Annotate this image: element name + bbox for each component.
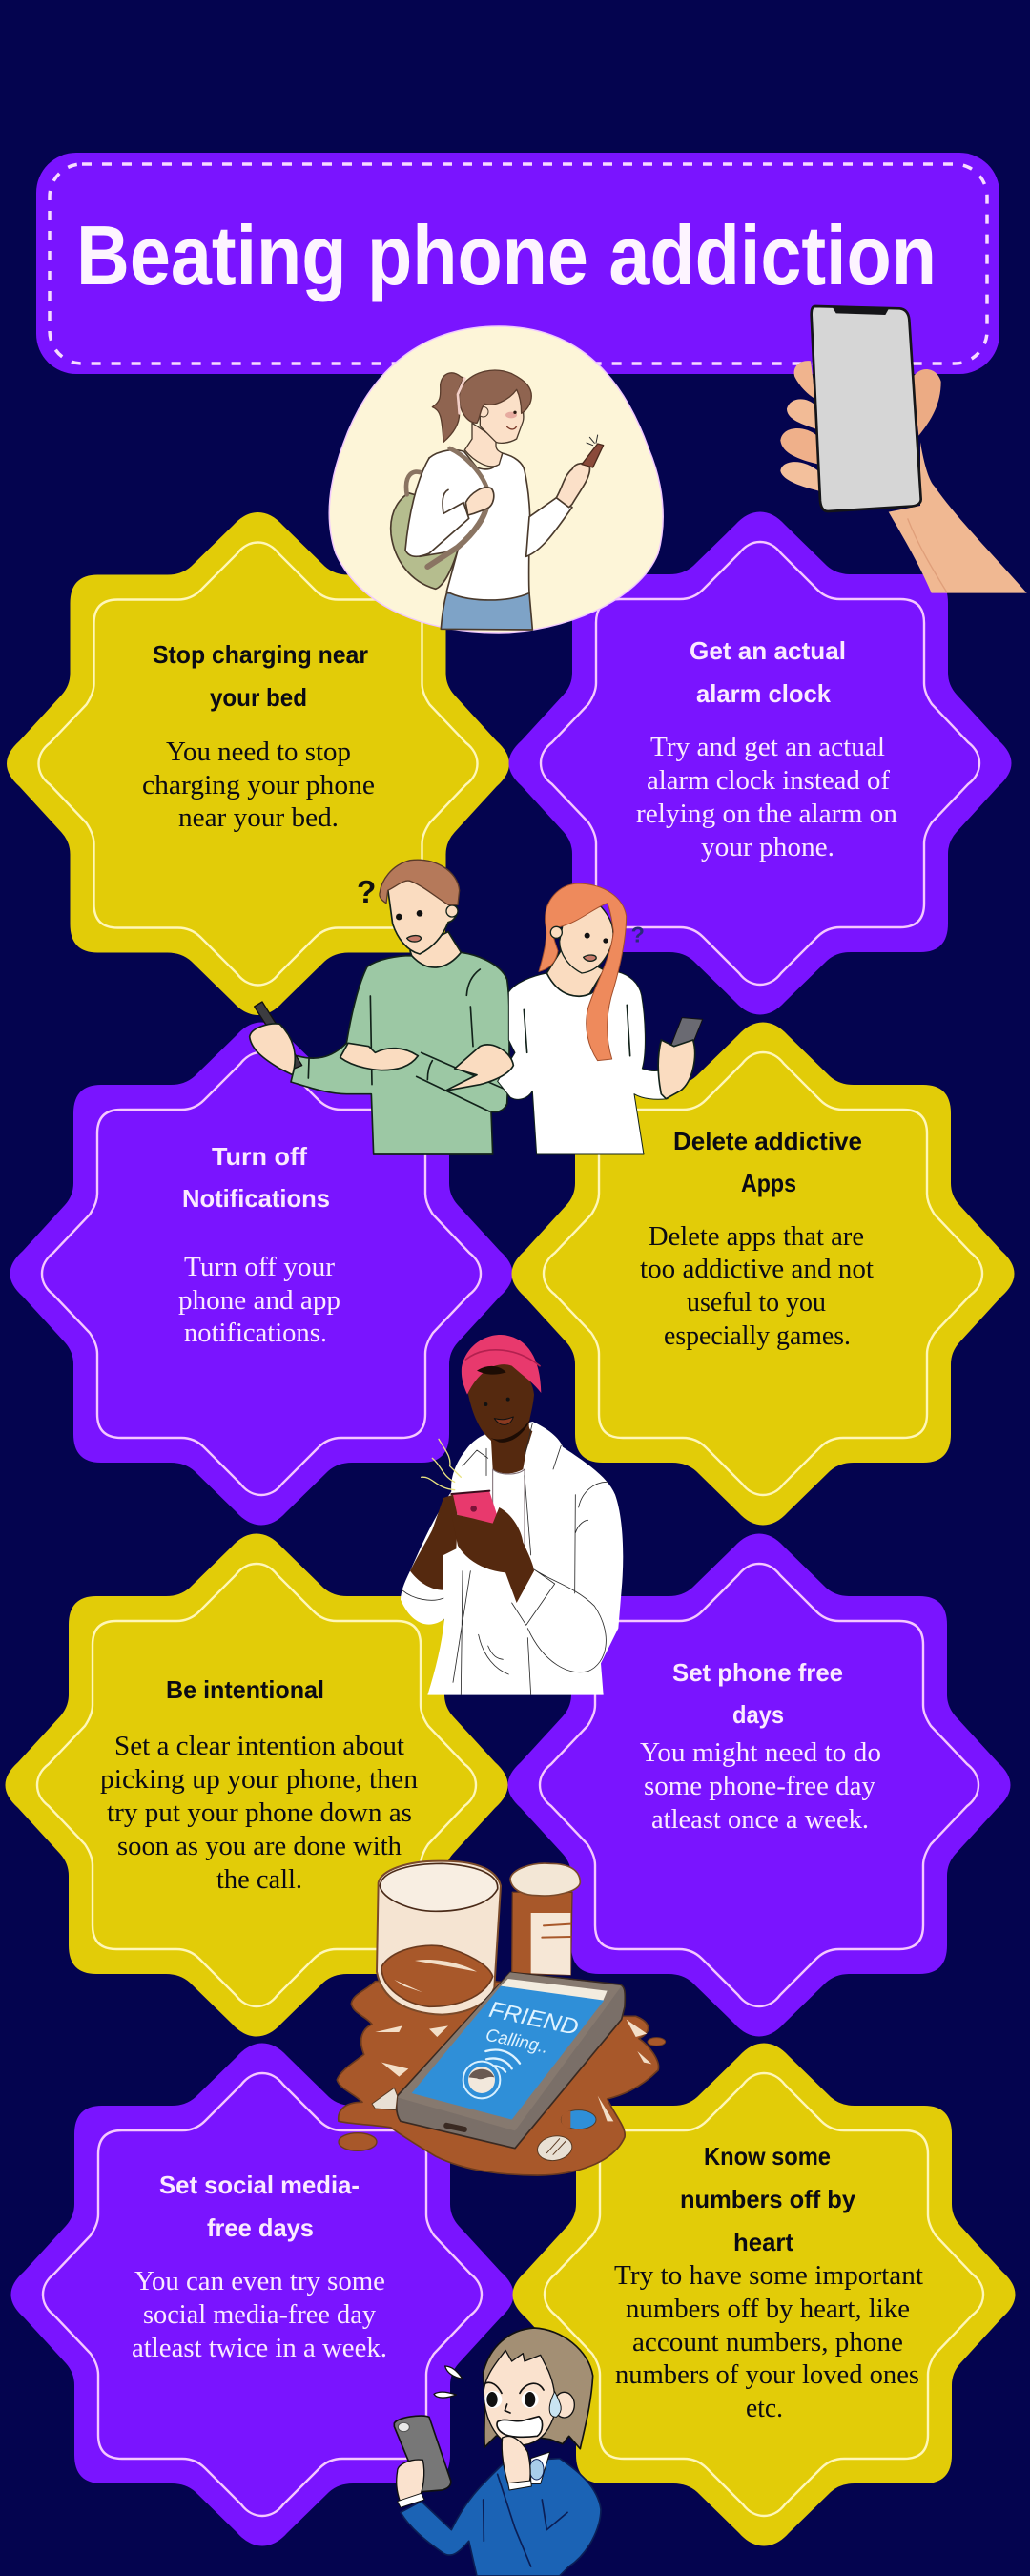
text block: alarm clock instead of xyxy=(647,765,890,796)
heading: days xyxy=(732,1700,784,1729)
heading: Stop charging near xyxy=(153,640,368,669)
panel: get an actual alarm clock xyxy=(509,511,1011,1015)
text block xyxy=(142,737,375,833)
heading: Set social media- xyxy=(159,2171,360,2199)
illustration: spilled drink and ringing phone xyxy=(337,1861,666,2175)
heading: heart xyxy=(733,2228,793,2256)
text block xyxy=(614,2260,923,2423)
text block: soon as you are done with xyxy=(117,1831,402,1861)
text block: near your bed. xyxy=(178,802,339,833)
girl: ? xyxy=(631,922,645,946)
text block: atleast twice in a week. xyxy=(132,2333,387,2363)
illustration: spilled drink and ringing phone: Calling.. xyxy=(484,2025,550,2057)
text block: the call. xyxy=(216,1864,302,1895)
heading xyxy=(673,1127,862,1197)
text block: social media-free day xyxy=(143,2299,376,2330)
heading xyxy=(153,640,368,712)
text block xyxy=(640,1221,874,1351)
text block: too addictive and not xyxy=(640,1254,874,1284)
title banner xyxy=(36,153,999,374)
illustration: man with pink beanie and phone xyxy=(401,1335,623,1695)
illustration: girl with backpack xyxy=(391,370,604,630)
text block: your phone. xyxy=(701,832,834,862)
illustration: worried woman with phone xyxy=(394,2328,601,2576)
heading xyxy=(159,2171,360,2242)
text block: try put your phone down as xyxy=(107,1797,412,1828)
text block xyxy=(100,1731,419,1895)
boy: ? xyxy=(357,875,376,910)
heading: numbers off by xyxy=(680,2185,856,2213)
heading: Get an actual xyxy=(690,636,846,665)
text block: useful to you xyxy=(687,1287,826,1318)
text block: Try to have some important xyxy=(614,2260,923,2291)
girl xyxy=(445,883,703,1154)
illustration: confused couple xyxy=(250,860,703,1154)
illustration: spilled drink and ringing phone: FRIEND xyxy=(486,1997,581,2041)
illustration: cream blob behind girl xyxy=(329,326,663,633)
text block xyxy=(640,1737,881,1835)
text block: etc. xyxy=(746,2393,783,2423)
panel: set social media-free days xyxy=(11,2044,513,2545)
text block: especially games. xyxy=(664,1320,851,1351)
heading xyxy=(690,636,846,708)
text block: Set a clear intention about xyxy=(114,1731,404,1761)
panel: know some numbers off by heart xyxy=(513,2044,1015,2545)
text block: some phone-free day xyxy=(644,1771,876,1801)
panel: set phone free days xyxy=(507,1534,1011,2036)
title: Beating phone addiction xyxy=(76,208,937,302)
heading: your bed xyxy=(210,683,307,712)
heading: alarm clock xyxy=(696,679,832,708)
text block: Try and get an actual xyxy=(650,732,885,762)
heading: Delete addictive xyxy=(673,1127,862,1155)
illustration: hand holding phone xyxy=(780,306,1027,593)
text block: You can even try some xyxy=(134,2266,385,2296)
text block: account numbers, phone xyxy=(632,2327,903,2358)
heading: Know some xyxy=(704,2142,831,2171)
heading xyxy=(182,1142,330,1213)
text block: phone and app xyxy=(178,1285,340,1316)
boy xyxy=(250,860,509,1154)
heading: Apps xyxy=(741,1169,796,1197)
panel: turn off notifications xyxy=(10,1023,513,1525)
heading: Notifications xyxy=(182,1184,330,1213)
text block xyxy=(636,732,897,862)
text block xyxy=(178,1252,340,1348)
text block xyxy=(132,2266,387,2363)
heading xyxy=(672,1658,843,1729)
panel: delete addictive apps xyxy=(511,1023,1015,1525)
heading: free days xyxy=(207,2213,314,2242)
panel: stop charging near your bed xyxy=(7,512,509,1015)
text block: charging your phone xyxy=(142,770,375,800)
text block: relying on the alarm on xyxy=(636,799,897,829)
heading: Set phone free xyxy=(672,1658,843,1687)
text block: Delete apps that are xyxy=(649,1221,864,1252)
text block: picking up your phone, then xyxy=(100,1764,419,1795)
text block: notifications. xyxy=(184,1318,327,1348)
text block: atleast once a week. xyxy=(651,1804,869,1835)
text block: numbers off by heart, like xyxy=(626,2294,910,2324)
panel: be intentional xyxy=(6,1534,507,2036)
text block: Turn off your xyxy=(184,1252,335,1282)
heading xyxy=(680,2142,856,2256)
heading: Turn off xyxy=(212,1142,307,1171)
text block: You need to stop xyxy=(166,737,351,767)
text block: You might need to do xyxy=(640,1737,881,1768)
heading: Be intentional xyxy=(166,1675,324,1704)
text block: numbers of your loved ones xyxy=(615,2359,919,2390)
